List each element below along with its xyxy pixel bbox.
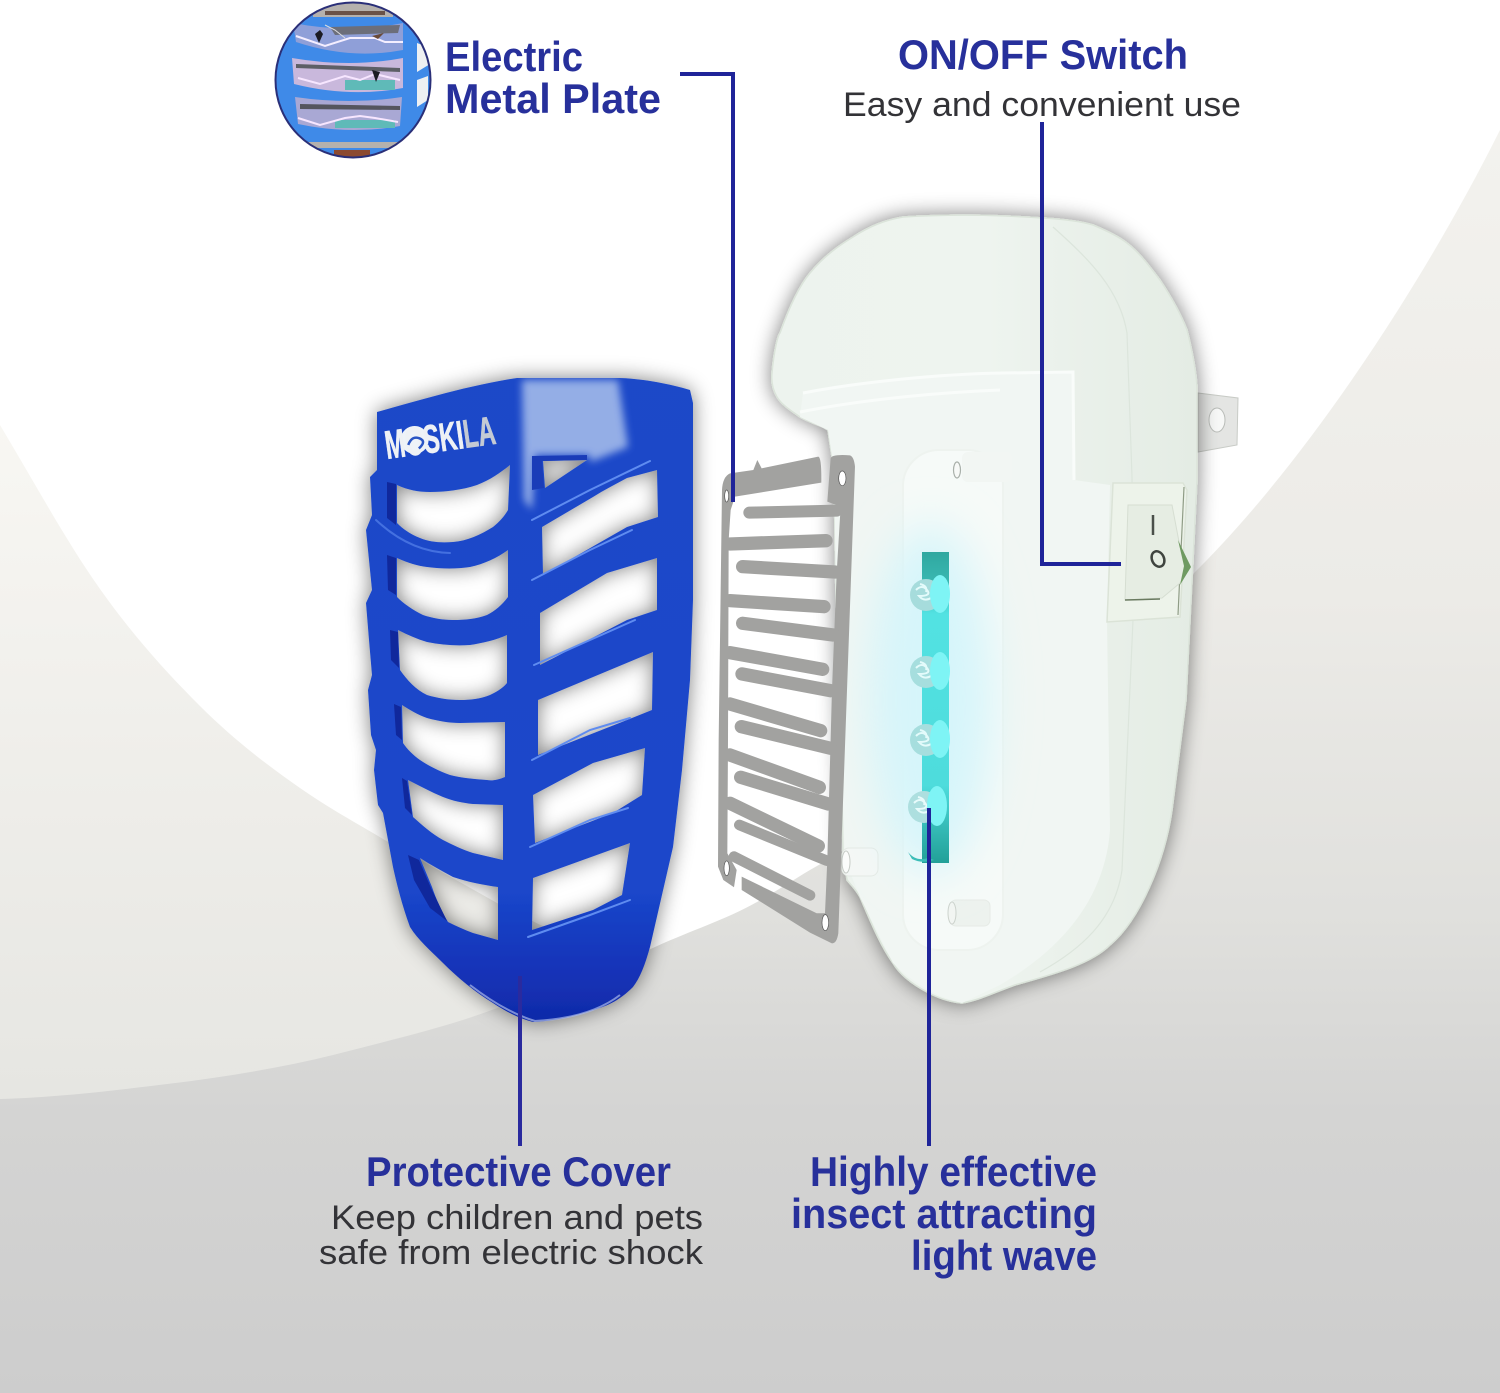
rocker switch <box>1107 483 1191 622</box>
light glow <box>868 525 992 875</box>
device front panel <box>800 372 1110 1003</box>
heading: on/off switch: ON/OFF Switch <box>898 31 1188 78</box>
protective cover <box>366 378 693 1022</box>
plate left rail <box>718 457 821 887</box>
text: easy and convenient use: Easy and convenient use <box>843 86 1241 124</box>
icon pane 1 <box>293 23 403 54</box>
icon ring <box>276 2 430 158</box>
heading: light wave: insect attracting <box>791 1190 1097 1237</box>
cover bottom edge highlight <box>470 985 620 1021</box>
icon bottom base <box>308 142 398 156</box>
heading: electric metal plate: Metal Plate <box>445 75 661 122</box>
device prong <box>1198 393 1238 452</box>
device housing <box>772 215 1197 1003</box>
device recess <box>903 450 1003 950</box>
LED socket <box>908 852 934 862</box>
device screw post top <box>954 452 1012 482</box>
plate fingers <box>730 511 837 895</box>
icon pane 3 <box>295 97 402 130</box>
icon: electric metal plate close-up <box>276 3 430 159</box>
heading: light wave: light wave <box>911 1232 1097 1279</box>
device peg left <box>842 848 878 876</box>
LED strip <box>908 552 950 863</box>
switch bezel dark edge <box>1178 487 1184 615</box>
switch green edge <box>1178 540 1191 585</box>
metal plate <box>718 455 855 943</box>
text: protective cover description: safe from electric shock <box>319 1234 704 1272</box>
LED 3 <box>910 720 950 758</box>
device right side band edge <box>1040 227 1133 972</box>
icon base <box>276 15 430 154</box>
product device body <box>772 215 1238 1003</box>
callout leader: protective cover <box>518 976 522 1146</box>
icon pane 2 <box>292 58 403 92</box>
switch off mark <box>1149 549 1167 569</box>
cover rib highlights <box>376 461 650 937</box>
cover dark recesses <box>387 455 587 921</box>
switch dark lip <box>1125 599 1160 600</box>
switch bezel <box>1107 483 1187 622</box>
LED 1 <box>910 575 950 613</box>
callout leader: metal plate <box>680 74 733 502</box>
background: beige left sweep <box>0 425 620 1100</box>
cover logo: MOSKILA <box>382 409 498 468</box>
heading: light wave: Highly effective <box>810 1148 1097 1195</box>
callout leader: light wave <box>927 808 931 1146</box>
cover body <box>366 378 693 1022</box>
heading: electric metal plate: Electric <box>445 33 583 80</box>
icon side windows <box>417 43 428 107</box>
switch on mark <box>1152 515 1154 535</box>
plate right rail <box>742 455 855 943</box>
LED 2 <box>910 652 950 690</box>
cover top light reflection <box>522 380 628 510</box>
text: protective cover description: Keep children and pets <box>331 1199 703 1237</box>
plate mounting holes <box>724 471 846 931</box>
device shoulder lines <box>800 372 1074 480</box>
LED 4 <box>908 786 947 826</box>
heading: protective cover: Protective Cover <box>366 1148 671 1195</box>
icon top strip <box>313 3 393 17</box>
device peg bottom <box>948 900 990 926</box>
switch rocker <box>1125 505 1190 600</box>
callout leader: on/off switch <box>1042 122 1121 564</box>
